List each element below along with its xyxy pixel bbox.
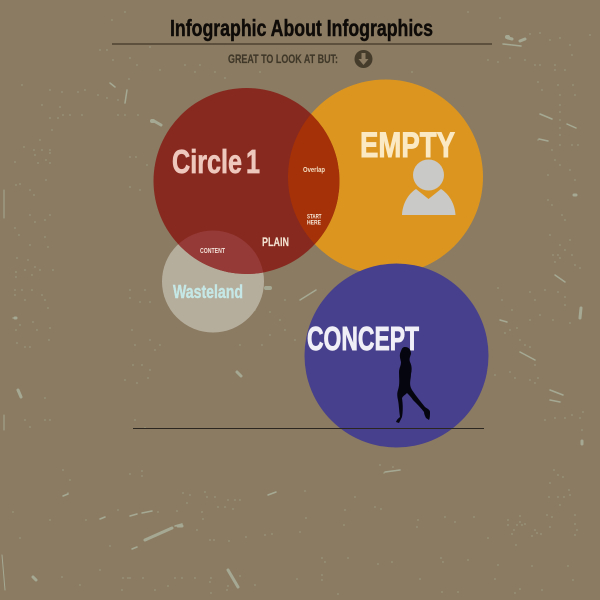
icon: person <box>402 160 456 215</box>
circle: beige <box>162 230 264 332</box>
label: start here: START <box>307 214 322 220</box>
baseline <box>133 428 484 430</box>
silhouette: walking woman <box>396 347 430 423</box>
overlap: red and beige <box>178 230 263 274</box>
circle: blue <box>304 264 488 448</box>
circle: orange <box>288 80 483 274</box>
label: Wasteland: Wasteland <box>173 282 243 302</box>
subtitle: GREAT TO LOOK AT BUT: <box>228 52 338 66</box>
header rule <box>112 43 492 45</box>
overlap: red and orange <box>288 114 340 244</box>
circle: red <box>154 88 340 274</box>
label: start here <box>307 214 322 226</box>
label: PLAIN: PLAIN <box>262 235 289 249</box>
label: CONCEPT: CONCEPT <box>307 320 419 357</box>
label: EMPTY: EMPTY <box>360 126 455 165</box>
label: start here: HERE <box>307 220 322 226</box>
label: CONTENT: CONTENT <box>200 248 226 255</box>
title: Infographic About Infographics <box>170 15 433 41</box>
label: Circle 1: Circle 1 <box>172 143 260 180</box>
label: Overlap: Overlap <box>303 165 325 174</box>
icon: down arrow <box>354 50 372 68</box>
